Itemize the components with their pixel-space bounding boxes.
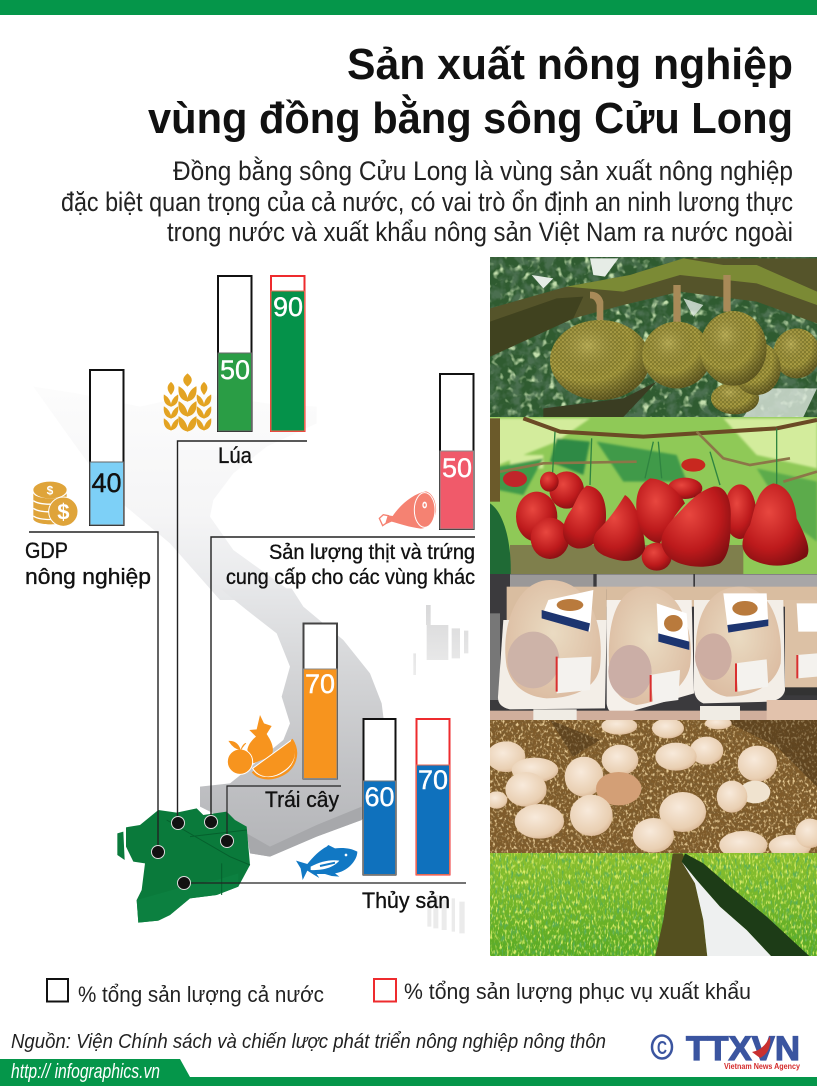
icon: wheat xyxy=(164,374,211,431)
title: Sản xuất nông nghiệp xyxy=(347,40,793,89)
bar: thủy sản 60 xyxy=(364,719,396,874)
label: Sản lượng thịt và trứng xyxy=(226,541,475,589)
connector: Lúa xyxy=(172,441,307,830)
bar: Lúa 50: 50 xyxy=(220,355,250,385)
source: Nguồn: Viện Chính sách và chiến lược phát triển nông nghiệp nông thôn xyxy=(11,1031,606,1053)
legend: export share: % tổng sản lượng phục vụ xuất khẩu xyxy=(404,979,751,1004)
legend: national share: % tổng sản lượng cả nước xyxy=(78,982,324,1007)
label: Sản lượng thịt và trứng: cung cấp cho các vùng khác xyxy=(226,566,475,589)
bar: thịt và trứng 50: 50 xyxy=(442,453,472,483)
footer band xyxy=(0,1059,817,1086)
label: GDP nông nghiệp: nông nghiệp xyxy=(25,564,151,589)
logo: TTXVN: C xyxy=(657,1038,667,1058)
logo: TTXVN: TTXVN xyxy=(686,1030,800,1068)
bar: Lúa 90 xyxy=(271,276,304,431)
label: Thủy sản: Thủy sản xyxy=(362,888,450,913)
photo: rice field xyxy=(490,853,817,957)
logo: TTXVN: Vietnam News Agency xyxy=(724,1061,800,1071)
photo: rose apples xyxy=(490,417,817,575)
map of Vietnam (grey) xyxy=(33,387,468,933)
bar: GDP 40: 40 xyxy=(91,468,122,498)
icon: coins: $ xyxy=(47,484,54,498)
connector: thủy sản xyxy=(178,876,466,890)
label: GDP nông nghiệp xyxy=(25,538,151,589)
bar: thủy sản 70: 70 xyxy=(418,765,448,795)
connector: trái cây xyxy=(220,786,341,848)
connector: thịt và trứng xyxy=(204,537,475,828)
bar: Lúa 90: 90 xyxy=(273,292,303,322)
bar: GDP 40 xyxy=(90,370,124,525)
top green bar xyxy=(0,0,817,15)
connector: GDP xyxy=(29,532,164,858)
icon: coins: $ xyxy=(57,499,69,524)
bar: Lúa 50 xyxy=(218,276,252,431)
bar: thủy sản 60: 60 xyxy=(364,782,395,812)
label: Sản lượng thịt và trứng: Sản lượng thịt và trứng xyxy=(269,541,475,564)
title xyxy=(148,40,793,143)
logo: TTXVN xyxy=(652,1030,800,1071)
bar: thịt và trứng 50 xyxy=(440,374,474,529)
intro text xyxy=(61,155,793,247)
label: Lúa: Lúa xyxy=(218,443,253,468)
map: Mekong Delta (green) xyxy=(117,808,250,923)
photo: durian xyxy=(490,257,817,417)
icon: fruits xyxy=(227,715,296,778)
bar: trái cây 70 xyxy=(304,624,337,778)
photo: eggs xyxy=(486,717,817,859)
icon: meat xyxy=(379,491,436,529)
website: http:// infographics.vn xyxy=(11,1061,160,1083)
label: GDP nông nghiệp: GDP xyxy=(25,538,68,563)
bar: thủy sản 70 xyxy=(416,719,450,874)
icon: coins xyxy=(33,482,78,526)
bar: trái cây 70: 70 xyxy=(305,669,335,699)
icon: fish xyxy=(296,845,357,880)
title: vùng đồng bằng sông Cửu Long xyxy=(148,93,793,143)
label: Trái cây: Trái cây xyxy=(265,787,339,812)
photo: packaged chicken xyxy=(490,574,817,720)
